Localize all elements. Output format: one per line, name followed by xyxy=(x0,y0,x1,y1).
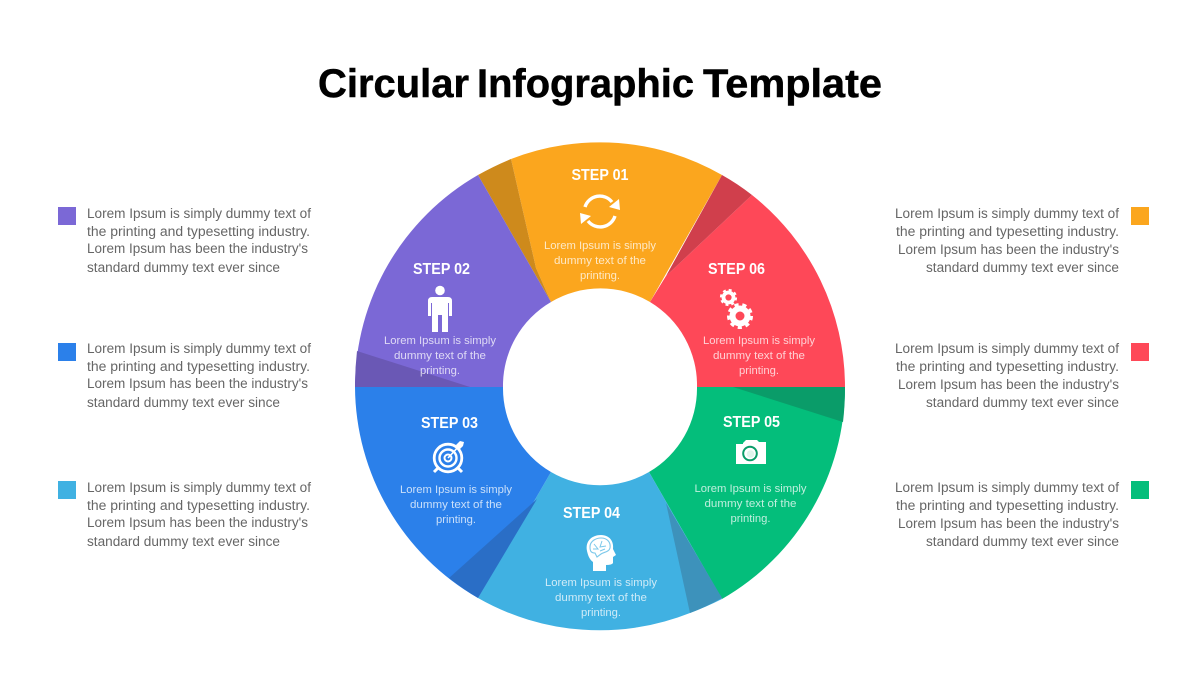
left item: purple: the printing and typesetting industry. xyxy=(87,224,310,239)
panel: step 02 segment: STEP 02 xyxy=(413,261,470,278)
icon: head with brain xyxy=(587,535,616,571)
left item: purple: standard dummy text ever since xyxy=(87,260,280,275)
right item: red: the printing and typesetting industry. xyxy=(896,359,1119,374)
panel: step 01 segment: Lorem Ipsum is simply xyxy=(544,240,657,252)
right item: red: Lorem Ipsum is simply dummy text of xyxy=(895,341,1119,356)
left item: blue: standard dummy text ever since xyxy=(87,395,280,410)
left item: purple: Lorem Ipsum is simply dummy text of xyxy=(87,206,311,221)
right item: green: Lorem Ipsum has been the industry's xyxy=(898,516,1119,531)
left item: purple xyxy=(58,206,311,275)
panel: step 01 segment: printing. xyxy=(580,270,620,282)
right item: red xyxy=(895,341,1149,410)
panel: step 03 segment xyxy=(355,387,551,598)
right item: green: Lorem Ipsum is simply dummy text of xyxy=(895,480,1119,495)
panel: step 04 segment: dummy text of the xyxy=(555,592,647,604)
right item: orange: Lorem Ipsum has been the industry's xyxy=(898,242,1119,257)
panel: step 05 segment: printing. xyxy=(730,513,770,525)
right item: green: the printing and typesetting industry. xyxy=(896,498,1119,513)
circular diagram xyxy=(355,142,845,630)
panel: step 02 segment: dummy text of the xyxy=(394,350,486,362)
right item: green: standard dummy text ever since xyxy=(926,534,1119,549)
right item: red: standard dummy text ever since xyxy=(926,395,1119,410)
panel: step 03 segment: STEP 03 xyxy=(421,415,478,432)
title: Infographic xyxy=(477,62,694,106)
icon: target xyxy=(434,441,464,472)
panel: step 01 segment: dummy text of the xyxy=(554,255,646,267)
left item: blue: the printing and typesetting industry. xyxy=(87,359,310,374)
title: Template xyxy=(703,62,882,106)
icon: gears xyxy=(721,290,752,328)
panel: step 05 segment xyxy=(649,387,845,599)
left item: light blue: Lorem Ipsum has been the industry's xyxy=(87,515,308,530)
left item: light blue: the printing and typesetting industry. xyxy=(87,498,310,513)
right item: orange xyxy=(895,206,1149,275)
panel: step 06 segment: printing. xyxy=(739,365,779,377)
title xyxy=(318,62,882,106)
right item: red: Lorem Ipsum has been the industry's xyxy=(898,377,1119,392)
panel: step 01 segment: STEP 01 xyxy=(572,167,629,184)
left item: purple: Lorem Ipsum has been the industry's xyxy=(87,241,308,256)
panel: step 06 segment xyxy=(650,175,845,387)
right item: orange: Lorem Ipsum is simply dummy text of xyxy=(895,206,1119,221)
panel: step 06 segment: STEP 06 xyxy=(708,261,765,278)
left item: blue: Lorem Ipsum has been the industry's xyxy=(87,376,308,391)
right item: green xyxy=(895,480,1149,549)
panel: step 06 segment: dummy text of the xyxy=(713,350,805,362)
right item: orange: standard dummy text ever since xyxy=(926,260,1119,275)
panel: step 03 segment: printing. xyxy=(436,514,476,526)
panel: step 03 segment: Lorem Ipsum is simply xyxy=(400,484,513,496)
left item: light blue: standard dummy text ever since xyxy=(87,534,280,549)
left item: light blue: Lorem Ipsum is simply dummy text of xyxy=(87,480,311,495)
left item: blue: Lorem Ipsum is simply dummy text of xyxy=(87,341,311,356)
left item: blue xyxy=(58,341,311,410)
panel: step 05 segment: STEP 05 xyxy=(723,414,780,431)
panel: step 04 segment: printing. xyxy=(581,607,621,619)
panel: step 05 segment: dummy text of the xyxy=(704,498,796,510)
panel: step 02 segment xyxy=(355,175,551,387)
title: Circular xyxy=(318,62,469,106)
panel: step 03 segment: dummy text of the xyxy=(410,499,502,511)
panel: step 02 segment: Lorem Ipsum is simply xyxy=(384,335,497,347)
panel: step 06 segment: Lorem Ipsum is simply xyxy=(703,335,816,347)
icon: camera xyxy=(736,440,766,464)
panel: step 04 segment: STEP 04 xyxy=(563,505,620,522)
panel: step 01 segment xyxy=(478,142,722,302)
panel: step 02 segment: printing. xyxy=(420,365,460,377)
right item: orange: the printing and typesetting industry. xyxy=(896,224,1119,239)
panel: step 04 segment: Lorem Ipsum is simply xyxy=(545,577,658,589)
panel: step 04 segment xyxy=(478,472,722,630)
icon: refresh arrows xyxy=(580,196,620,227)
panel: step 05 segment: Lorem Ipsum is simply xyxy=(694,483,807,495)
icon: person xyxy=(428,286,452,332)
left item: light blue xyxy=(58,480,311,549)
